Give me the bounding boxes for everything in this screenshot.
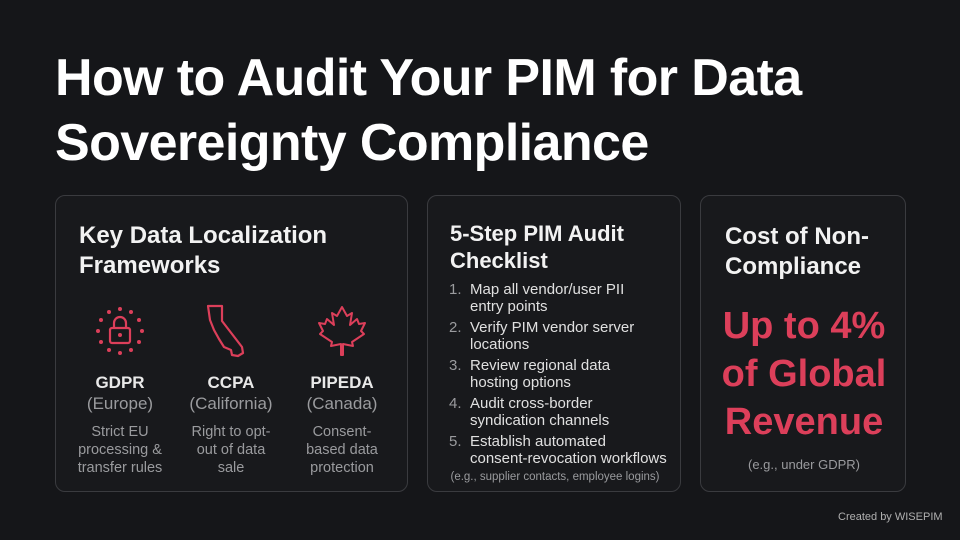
checklist items: 4. — [449, 395, 462, 412]
checklist items: consent-revocation workflows — [470, 450, 667, 467]
icon: EU lock — [96, 307, 144, 355]
checklist items: Review regional data hosting options — [470, 357, 610, 391]
framework: GDPR: Strict EU processing & transfer rules — [78, 424, 162, 476]
checklist items: Establish automated — [470, 433, 606, 450]
framework: GDPR — [78, 373, 162, 476]
title: How to Audit Your PIM for Data Sovereignty Compliance — [55, 49, 802, 172]
panel: checklist — [427, 195, 681, 492]
panel: frameworks — [55, 195, 408, 492]
heading: checklist: 5-Step PIM Audit Checklist — [450, 221, 624, 273]
framework: PIPEDA — [306, 373, 378, 476]
checklist items: 2. — [449, 319, 462, 336]
framework: CCPA — [189, 373, 273, 476]
framework: CCPA: Right to opt-out of data sale — [192, 424, 270, 476]
checklist items: Verify PIM vendor server locations — [470, 319, 634, 353]
panel: cost — [700, 195, 906, 492]
stat: 4% revenue: Up to 4% of Global Revenue — [722, 305, 886, 443]
checklist items: Audit cross-border syndication channels — [470, 395, 609, 429]
framework: CCPA: CCPA — [208, 373, 254, 392]
framework: GDPR: (Europe) — [87, 394, 153, 413]
checklist items: 3. — [449, 357, 462, 374]
checklist items: Map all vendor/user PII entry points — [470, 281, 624, 315]
note: (e.g., under GDPR) — [748, 457, 860, 472]
footnote: (e.g., supplier contacts, employee logins) — [450, 471, 660, 483]
heading: cost: Cost of Non-Compliance — [725, 223, 869, 280]
credit: Created by WISEPIM — [838, 511, 943, 523]
framework: PIPEDA: Consent-based data protection — [306, 424, 378, 476]
icon: maple leaf — [318, 306, 366, 356]
checklist items: 5. — [449, 433, 462, 450]
checklist items: 1. — [449, 281, 462, 298]
framework: PIPEDA: PIPEDA — [310, 373, 374, 392]
framework: PIPEDA: (Canada) — [307, 394, 377, 413]
framework: CCPA: (California) — [189, 394, 273, 413]
framework: GDPR: GDPR — [95, 373, 145, 392]
checklist items — [449, 281, 667, 467]
icon: California — [206, 304, 244, 358]
heading: frameworks: Key Data Localization Frameworks — [79, 222, 327, 279]
